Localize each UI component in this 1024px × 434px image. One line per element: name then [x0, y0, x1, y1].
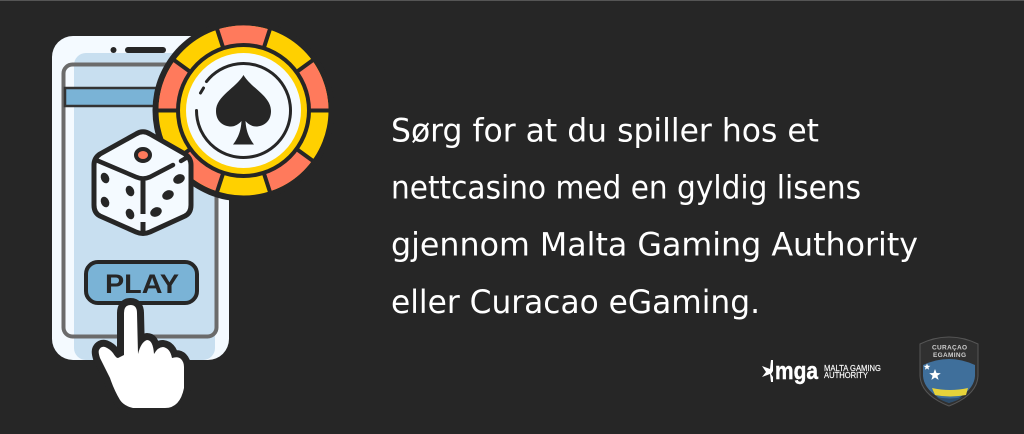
text block: main message: nettcasino med en gyldig lisens: [391, 168, 861, 206]
icon: pointing hand: [99, 305, 184, 408]
text block: main message: eller Curacao eGaming.: [391, 283, 760, 321]
button: PLAY: PLAY: [105, 269, 179, 299]
text block: main message: gjennom Malta Gaming Authority: [391, 226, 918, 264]
text block: main message: [391, 112, 918, 321]
logo: Malta Gaming Authority: mga: [775, 358, 819, 385]
logo: Curaçao eGaming shield: [920, 337, 978, 406]
text block: main message: Sørg for at du spiller hos et: [391, 112, 819, 150]
icon: poker chip: [148, 15, 339, 206]
icon: dice: [94, 132, 191, 234]
logo: Malta Gaming Authority: MALTA GAMING: [824, 364, 881, 373]
logo: Malta Gaming Authority: [762, 358, 881, 385]
logo: Malta Gaming Authority: AUTHORITY: [824, 371, 869, 380]
button: PLAY: [86, 262, 197, 303]
logo: Curaçao eGaming shield: CURAÇAO: [932, 344, 967, 352]
icon: smartphone: [52, 36, 229, 360]
logo: Curaçao eGaming shield: EGAMING: [933, 352, 966, 359]
